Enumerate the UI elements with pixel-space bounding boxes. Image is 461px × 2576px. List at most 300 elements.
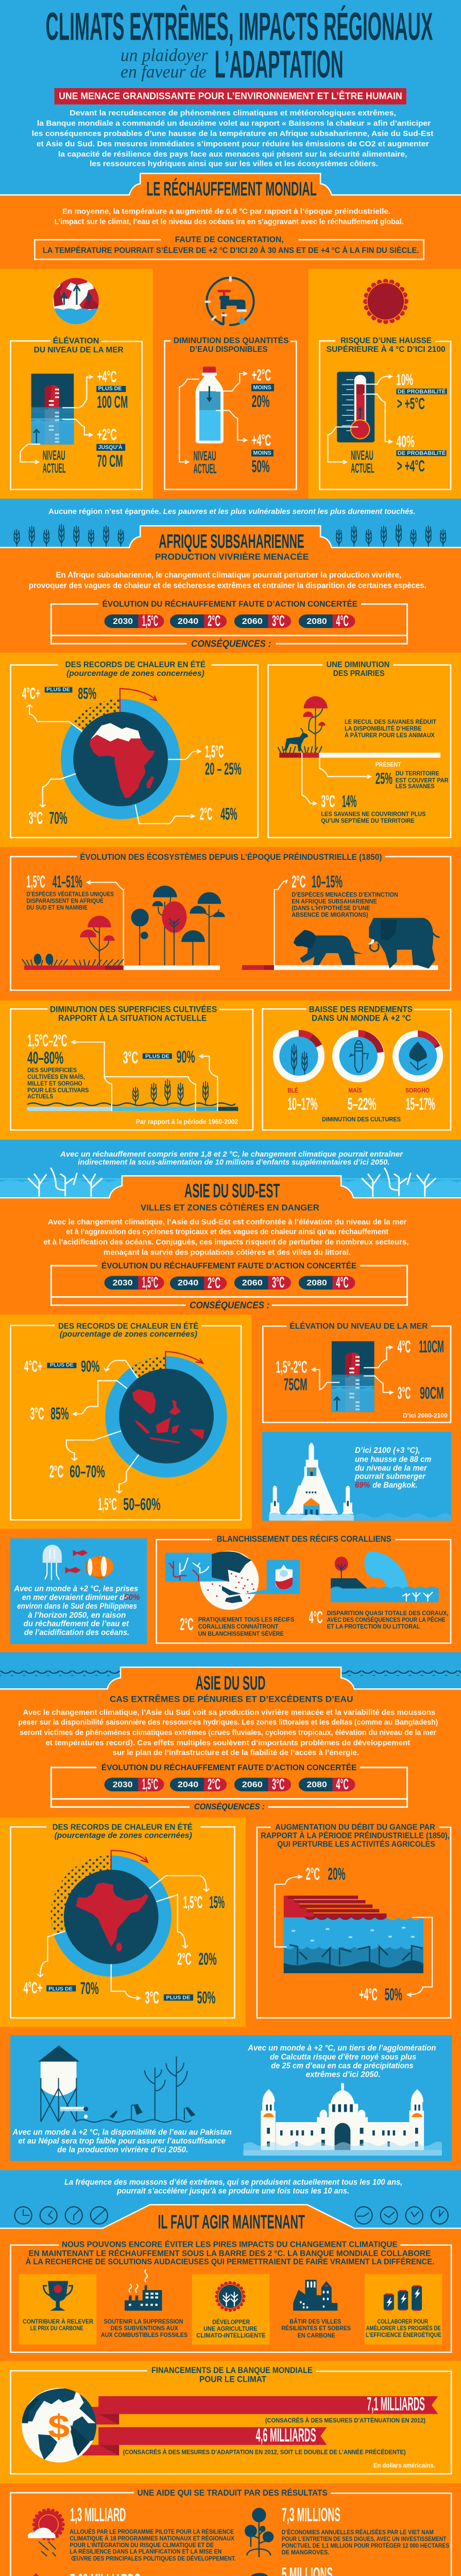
connectors [275, 1875, 432, 1996]
pills: 2080 [306, 617, 327, 626]
frame and heading [11, 2240, 451, 2352]
panel: une aide qui se traduit par des résultats [11, 2487, 451, 2576]
result: 1,3 milliard: ALLOUÉS PAR LE PROGRAMME PILOTE POUR LA RÉSILIENCE [70, 2528, 234, 2535]
icon: wheat row [14, 524, 446, 547]
values: PLUS DE [166, 1994, 190, 2001]
panel: risque d'une hausse [319, 281, 451, 489]
panel: élévation du niveau de la mer: +2°C [97, 426, 117, 444]
text block [345, 718, 437, 739]
values: NIVEAU [351, 448, 373, 463]
values [351, 371, 447, 476]
result: 7,66 milliards [28, 2570, 238, 2576]
pills [105, 1274, 355, 1291]
values: 1,5°C [183, 1892, 202, 1911]
icon: globe with dollar [22, 2388, 97, 2463]
intro text [32, 109, 433, 168]
values: MOINS [253, 384, 271, 391]
tile: villes [281, 2280, 351, 2339]
text block: 69% [355, 1481, 370, 1489]
chart: rising sea column [332, 1341, 374, 1412]
chart: south-east asia donut [105, 1351, 227, 1478]
values: 3°C [145, 1988, 159, 2007]
pills: 2060 [242, 617, 263, 626]
values: 3°C [321, 792, 335, 811]
values: 25% [375, 770, 392, 787]
illustration: temple [269, 1436, 451, 1521]
values: 2°C [306, 1864, 320, 1883]
panel: diminution de l'eau: 50% [252, 457, 269, 476]
statement: Aucune région n’est épargnée. [48, 507, 161, 516]
illustration: trees [22, 886, 225, 970]
section header: PRODUCTION VIVRIÈRE MENACÉE [155, 552, 309, 562]
frame and heading: (pourcentage de zones concernées) [55, 1831, 192, 1840]
paragraph [43, 1218, 408, 1257]
values [321, 761, 448, 824]
section header: VILLES ET ZONES CÔTIÈRES EN DANGER [141, 1202, 319, 1212]
tile: agriculture [192, 2274, 269, 2345]
panel: solutions [11, 2240, 451, 2352]
panel: débit du gange: 50% [385, 1985, 402, 2004]
pills: 2080 [306, 1278, 327, 1287]
values: 70% [49, 808, 67, 827]
text block [354, 1446, 431, 1489]
panel: records de chaleur asie du sud [11, 1822, 234, 2018]
section header [0, 1667, 461, 1704]
section: asie du sud-est intro [0, 1150, 461, 1311]
values: ACTUEL [43, 461, 66, 476]
icon: water tap [204, 276, 254, 327]
values [24, 1358, 161, 1514]
pills: 2°C [208, 1775, 220, 1792]
map: coral reef globe [200, 1551, 259, 1610]
text block: en mer devraient diminuer de [22, 1593, 128, 1602]
panel: diminution de l'eau [165, 276, 296, 489]
frame and heading: ÉLÉVATION [53, 336, 99, 345]
timeline box: 4°C [336, 612, 349, 629]
tile: efficience énergétique [365, 2274, 442, 2345]
values: PLUS DE [50, 1362, 74, 1368]
warming intro [55, 207, 404, 226]
panel: baisse des rendements [263, 1005, 451, 1130]
timeline box [51, 1763, 407, 1811]
text: 20 – 25% [205, 759, 242, 778]
tile: subventions: SOUTENIR LA SUPPRESSION [104, 2318, 183, 2325]
frame and heading: DU NIVEAU DE LA MER [34, 345, 124, 354]
values: DES SUPERFICIES [27, 1066, 77, 1074]
values: 3°C [123, 1048, 138, 1067]
panel: fish catch [10, 1538, 147, 1644]
red banner [55, 88, 406, 105]
connectors [37, 1876, 209, 2000]
values: +4°C [360, 1985, 378, 2004]
timeline box [51, 599, 407, 649]
text block [14, 1584, 140, 1637]
panel: évolution des écosystèmes [11, 852, 451, 990]
values: ACTUELS [27, 1093, 53, 1100]
text block: 4°C [309, 1608, 323, 1627]
right values: (DANS L’HYPOTHÈSE D’UNE [292, 905, 370, 911]
values: ACTUEL [194, 461, 217, 476]
result: 1,3 milliard: POUR L’INTÉGRATION DU RISQUE CLIMATIQUE ET DE [70, 2541, 214, 2549]
pills: 2030 [113, 1780, 132, 1789]
values: PLUS DE [48, 1986, 73, 1991]
section header [0, 526, 461, 562]
left values: DISPARAISSENT EN AFRIQUE [26, 897, 104, 904]
pills: 2060 [242, 1780, 263, 1789]
pills: 3°C [272, 1775, 285, 1792]
text: 15% [209, 1892, 225, 1911]
text: pakistan [12, 2128, 232, 2154]
values [43, 368, 128, 476]
values: POUR LES CULTIVARS [27, 1087, 89, 1094]
tile: villes: RÉSILIENTES ET SOBRES [281, 2325, 351, 2332]
illustration: flooded river bank [284, 1895, 423, 1973]
chart: africa donut [61, 689, 180, 819]
values: 75CM [284, 1375, 307, 1394]
panel: diminution de l'eau: 20% [252, 392, 269, 411]
text: pakistan: et au Népal sera trop faible pour assurer l’autosuffisance [18, 2137, 226, 2145]
frame and heading [11, 2487, 451, 2576]
timeline box: CONSÉQUENCES : [190, 1299, 269, 1311]
connectors [66, 1361, 139, 1493]
timeline box [51, 1261, 407, 1311]
text: 100 CM [97, 393, 128, 412]
values: NIVEAU [194, 448, 216, 463]
frame and heading [257, 1822, 451, 2018]
values: 2°C [200, 804, 213, 823]
right values [292, 872, 398, 918]
values: 4°C+ [22, 685, 40, 703]
pills: 2°C [208, 612, 220, 629]
pills: 2030 [113, 1278, 132, 1287]
right values: 10–15% [312, 872, 343, 891]
map: south-east asia [132, 1389, 204, 1444]
right values: 2°C [292, 872, 306, 891]
tile: agriculture: DÉVELOPPER [212, 2318, 250, 2326]
values: 70% [80, 1979, 99, 1998]
tile: agriculture: UNE AGRICULTURE [203, 2325, 257, 2332]
values: 85% [50, 1404, 69, 1423]
text block: UN BLANCHISSEMENT SÉVÈRE [198, 1630, 284, 1637]
panel: financements de la banque mondiale [11, 2365, 451, 2474]
values: 20% [328, 1864, 346, 1883]
values: 1,5°C–2°C [27, 1031, 67, 1050]
frame and heading: DIMINUTION DES QUANTITÉS [174, 336, 289, 345]
section header: le réchauffement mondial [0, 174, 461, 200]
panel: élévation du niveau de la mer: +4°C [97, 368, 117, 386]
panel: diminution des prairies [268, 660, 451, 838]
tile: prix du carbone [19, 2274, 96, 2345]
panel: records de chaleur afrique: 45% [220, 804, 237, 823]
tile: prix du carbone: CONTRIBUER À RELEVER [23, 2318, 93, 2325]
panel: diminution de l'eau: +4°C [252, 431, 271, 449]
values [306, 1864, 402, 2004]
frame and heading [11, 1321, 241, 1520]
wave lines [0, 1671, 461, 1676]
values: 10–17% [287, 1094, 317, 1113]
panel: records de chaleur asie du sud-est [11, 1321, 241, 1520]
result: 7,3 millions: DE MANGROVES. [282, 2549, 329, 2556]
chart: cultivated land bar [27, 1079, 238, 1111]
ribbons behind globe [82, 2407, 119, 2455]
chart: south asia donut [50, 1851, 172, 1977]
timeline box: 4°C [336, 1775, 349, 1792]
values: PLUS DE [98, 385, 122, 392]
chart: rising sea column [31, 374, 74, 445]
panel: évolution des écosystèmes: D’ESPÈCES VÉGÉTALES UNIQUES [26, 891, 114, 897]
icon: coral inset [165, 1553, 228, 1582]
values: JUSQU’À [98, 444, 123, 451]
left values [26, 872, 114, 911]
callout: faute de concertation: FAUTE DE CONCERTATION, [175, 235, 284, 244]
pills: 2080 [306, 1780, 327, 1789]
pills: 1,5°C [142, 612, 158, 629]
result: 1,3 milliard: LA RÉSILIENCE DANS LA PLANIFICATION ET LA MISE EN [70, 2548, 221, 2555]
illustration: water and coral [0, 1168, 461, 1198]
subtitle: en faveur de [121, 61, 207, 82]
section header: ASIE DU SUD [196, 1672, 265, 1694]
frame and heading [11, 1004, 253, 1130]
values [287, 1087, 435, 1123]
right values: ABSENCE DE MIGRATIONS) [292, 911, 368, 918]
frame and heading [11, 852, 451, 990]
values: 3°C [30, 1404, 44, 1423]
panel: diminution de l'eau: +2°C [252, 366, 271, 384]
title block [45, 5, 433, 86]
text: calcutta [247, 2043, 436, 2079]
values: 10% [396, 371, 413, 388]
tile: subventions [101, 2269, 187, 2338]
bar: adaptation [98, 2424, 406, 2455]
values: 40–80% [27, 1048, 63, 1067]
tile: agriculture: CLIMATO-INTELLIGENTE [196, 2332, 265, 2339]
pills: 2040 [178, 1278, 198, 1287]
text block [180, 1608, 448, 1637]
frame and heading: DES RECORDS DE CHALEUR EN ÉTÉ [65, 660, 206, 669]
text block: du réchauffement de l’eau et [24, 1619, 129, 1628]
pills: 2040 [178, 1780, 198, 1789]
frame and heading [263, 1005, 451, 1130]
icon: sun seal [366, 281, 406, 321]
section: afrique subsaharienne intro [0, 507, 461, 649]
values: SORGHO [405, 1087, 430, 1094]
illustration: coast wave [331, 1551, 439, 1602]
subtitle: un plaidoyer [121, 45, 208, 65]
values: 1,5°-2°C [276, 1357, 307, 1376]
values: 85% [78, 685, 96, 703]
connectors [87, 880, 287, 965]
frame and heading: (pourcentage de zones concernées) [66, 669, 204, 678]
tile: villes: EN CARBONE [298, 2332, 335, 2339]
map: india [76, 1883, 148, 1952]
statement [48, 507, 416, 516]
timeline box: CONSÉQUENCES : [191, 638, 271, 649]
values: 90% [81, 1358, 99, 1375]
panel: bangkok [262, 1432, 451, 1521]
panel: élévation du niveau de la mer: 70 CM [97, 451, 123, 470]
icon: bleached coral inset [244, 1560, 300, 1594]
paragraph [29, 570, 426, 590]
subtitle [121, 43, 344, 86]
text: pakistan: de la production vivrière d’ici 2050. [57, 2145, 188, 2154]
frame and heading: (pourcentage de zones concernées) [60, 1330, 197, 1338]
text: calcutta: extrêmes d’ici 2050. [306, 2070, 381, 2079]
right values: EN AFRIQUE SUBSAHARIENNE [292, 898, 377, 905]
values: 60–70% [70, 1462, 105, 1481]
left values: DU SUD ET EN NAMIBIE [26, 904, 88, 911]
frame and heading [319, 336, 451, 489]
values: PLUS DE [145, 1053, 169, 1059]
icon: thermometer [337, 372, 374, 443]
frame and heading [11, 336, 142, 489]
text block: de Bangkok. [372, 1481, 418, 1489]
frame and heading [165, 336, 296, 489]
pills: 2030 [113, 617, 133, 626]
panel: débit du gange [257, 1822, 451, 2018]
frame and heading: UNE DIMINUTION [327, 660, 389, 669]
values: Par rapport à la période 1960-2002 [136, 1118, 238, 1126]
pills: 3°C [272, 1274, 285, 1291]
pills: 2040 [178, 617, 198, 626]
pills: 1,5°C [142, 1274, 158, 1291]
frame and heading [11, 660, 258, 838]
illustration: lion and elephant [242, 918, 439, 970]
timeline box: 4°C [336, 1274, 349, 1291]
text block: environ dans le Sud des Philippines [17, 1602, 137, 1611]
values: 5–22% [348, 1094, 377, 1113]
values: 2°C [177, 1949, 192, 1968]
tile: villes: BÂTIR DES VILLES [289, 2318, 341, 2325]
result: 1,3 milliard: CLIMATIQUE À 18 PROGRAMMES NATIONAUX ET RÉGIONAUX [70, 2535, 234, 2542]
text block: 2°C [180, 1615, 194, 1634]
values: BLÉ [287, 1087, 298, 1094]
text block: PRATIQUEMENT TOUS LES RÉCIFS [198, 1616, 294, 1623]
panel: records de chaleur asie du sud: 20% [198, 1949, 217, 1968]
map: africa [90, 723, 155, 798]
tile: prix du carbone: LE PRIX DU CARBONE [30, 2325, 83, 2332]
values: PLUS DE [46, 686, 70, 692]
tile: subventions: DES SUBVENTIONS AUX [111, 2325, 178, 2332]
values [27, 1031, 238, 1126]
connectors [179, 372, 247, 464]
values: ACTUEL [351, 461, 374, 476]
results continued [3, 2563, 458, 2576]
section header [0, 2205, 461, 2233]
panel: records de chaleur asie du sud-est: 50–60% [123, 1495, 161, 1514]
connectors [72, 1040, 217, 1111]
frame and heading [11, 2365, 451, 2474]
values: CULTIVÉES EN MAÏS, [27, 1073, 85, 1080]
connectors [328, 375, 392, 464]
panel: élévation du niveau de la mer (asie du sud-est) [263, 1321, 451, 1422]
panel: pakistan and calcutta [10, 2035, 452, 2161]
values: 1,5°C [98, 1495, 117, 1514]
result: 1,3 milliard [28, 2504, 236, 2562]
values: 4°C [398, 1337, 411, 1356]
illustration: jellyfish and fish [43, 1545, 113, 1580]
values: 14% [342, 792, 356, 811]
frame and heading: DES RECORDS DE CHALEUR EN ÉTÉ [53, 1822, 193, 1832]
paragraph [18, 1708, 438, 1757]
values: 40% [396, 433, 415, 450]
values [24, 1892, 225, 2007]
frame and heading: FINANCEMENTS DE LA BANQUE MONDIALE [151, 2365, 313, 2375]
chart: corn donut [332, 1030, 385, 1082]
bar: atténuation [98, 2393, 438, 2424]
values: MOINS [253, 450, 271, 456]
icon: savanna tree and gazelle [278, 696, 440, 758]
frame and heading [263, 1321, 451, 1422]
icon: clocks [15, 2207, 448, 2224]
values: NIVEAU [43, 448, 65, 463]
text block: 50% [124, 1593, 140, 1602]
text block: Avec un monde à +2 °C, les prises [14, 1584, 138, 1593]
text block: de l’acidification des océans. [24, 1628, 129, 1637]
illustration: water tower and trees [38, 2045, 196, 2122]
values: MILLET ET SORGHO [27, 1080, 82, 1087]
statement [64, 2178, 402, 2195]
chart: wheat donut [273, 1030, 325, 1082]
left values: 1,5°C [26, 872, 45, 891]
connectors [312, 1346, 393, 1394]
panel: élévation du niveau de la mer [11, 277, 142, 489]
statement [60, 1150, 403, 1166]
values: 4°C+ [24, 1979, 42, 1997]
result: 1,3 milliard: 1,3 MILLIARD [70, 2504, 126, 2525]
frame and heading [11, 1822, 234, 2018]
section header [0, 1176, 461, 1212]
values: MAÏS [348, 1087, 362, 1094]
frame and heading: RAPPORT À LA SITUATION ACTUELLE [58, 1013, 207, 1023]
panel: records de chaleur afrique: 1,5°C [205, 742, 224, 761]
section: asie du sud intro [0, 1667, 461, 1811]
frame and heading [157, 1534, 451, 1643]
values [22, 685, 242, 827]
left values: 41–51% [53, 872, 82, 891]
icon: bottle [196, 367, 224, 444]
text: pakistan: Avec un monde à +2 °C, la disponibilité de l’eau au Pakistan [12, 2128, 232, 2137]
panel: records de chaleur asie du sud: 50% [197, 1988, 215, 2007]
callout: faute de concertation [35, 235, 424, 259]
panel: records de chaleur afrique [11, 660, 258, 838]
connectors [302, 753, 371, 805]
pills: 2060 [242, 1278, 263, 1287]
pills: 3°C [272, 612, 285, 629]
values: 2°C [49, 1462, 63, 1481]
pills: 2°C [208, 1274, 220, 1291]
frame and heading: DIMINUTION DES SUPERFICIES CULTIVÉES [50, 1004, 217, 1014]
text block: à l’horizon 2050, en raison [28, 1611, 126, 1620]
values: 4°C+ [24, 1358, 42, 1375]
tile: subventions: AUX COMBUSTIBLES FOSSILES [101, 2331, 187, 2338]
panel: diminution des superficies cultivées [11, 1004, 253, 1130]
values [276, 1337, 448, 1419]
values: 3°C [28, 808, 43, 827]
pills: 1,5°C [142, 1775, 158, 1792]
chart: sorghum donut [392, 1030, 443, 1082]
section: il faut agir maintenant [0, 2178, 461, 2233]
frame and heading [268, 660, 451, 838]
values: 3°C [398, 1383, 411, 1402]
values [194, 366, 274, 476]
connectors [26, 705, 200, 824]
frame and heading: POUR LE CLIMAT [199, 2374, 267, 2384]
frame and heading: DES RECORDS DE CHALEUR EN ÉTÉ [58, 1321, 198, 1331]
result: 7,3 millions [245, 2504, 449, 2557]
connectors [20, 375, 92, 464]
pills [105, 1775, 355, 1792]
icon: globe with dollar: $ [48, 2409, 70, 2445]
